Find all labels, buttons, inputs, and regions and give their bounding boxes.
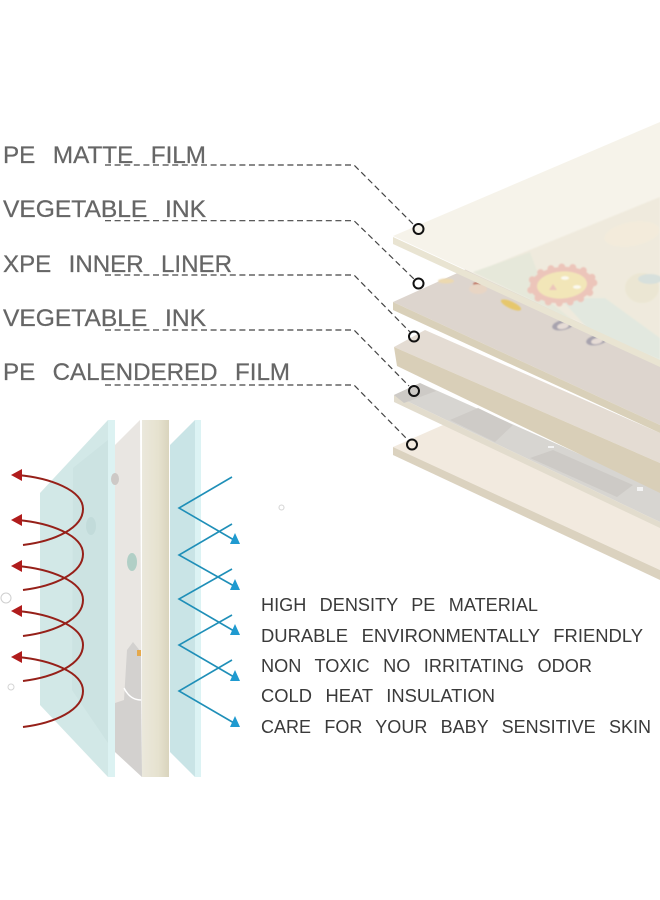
benefits list: COLD HEAT INSULATION bbox=[261, 686, 495, 706]
benefits list: HIGH DENSITY PE MATERIAL bbox=[261, 595, 538, 615]
label: PE calendered film: PE CALENDERED FILM bbox=[3, 359, 290, 386]
heat insulation cross section bbox=[40, 420, 201, 777]
panel: right glass film bbox=[170, 420, 201, 777]
panel: printed layer bbox=[111, 420, 142, 777]
layer: PE calendered film bbox=[393, 425, 660, 580]
benefits list: NON TOXIC NO IRRITATING ODOR bbox=[261, 656, 592, 676]
label: vegetable ink lower bbox=[3, 305, 419, 396]
print seen through film bbox=[473, 197, 660, 360]
benefits list: CARE FOR YOUR BABY SENSITIVE SKIN bbox=[261, 717, 651, 737]
label: XPE inner liner: XPE INNER LINER bbox=[3, 251, 232, 278]
benefits list bbox=[261, 595, 651, 737]
layer: PE matte film bbox=[393, 122, 660, 367]
layer: lower vegetable ink bbox=[394, 383, 660, 528]
panel: foam core bbox=[142, 420, 169, 777]
label: PE calendered film bbox=[3, 359, 417, 450]
blue cold reflection arrows bbox=[179, 477, 240, 727]
panel: left glass film bbox=[40, 420, 115, 777]
layer: upper vegetable ink bbox=[393, 266, 660, 433]
label: PE matte film: PE MATTE FILM bbox=[3, 142, 206, 169]
label: vegetable ink: VEGETABLE INK bbox=[3, 196, 206, 223]
decorative bubbles bbox=[1, 505, 284, 690]
benefits list: DURABLE ENVIRONMENTALLY FRIENDLY bbox=[261, 626, 643, 646]
layer: XPE inner liner bbox=[394, 330, 660, 493]
icon: lion bbox=[529, 265, 595, 305]
label: PE matte film bbox=[3, 142, 424, 234]
label: XPE inner liner bbox=[3, 251, 419, 342]
label: vegetable ink bbox=[3, 196, 424, 288]
layer labels with leader lines bbox=[3, 142, 424, 450]
exploded mat layers bbox=[393, 122, 660, 580]
decoration: printed shapes bbox=[438, 278, 609, 347]
red heat reflection arrows bbox=[11, 469, 83, 727]
label: vegetable ink lower: VEGETABLE INK bbox=[3, 305, 206, 332]
